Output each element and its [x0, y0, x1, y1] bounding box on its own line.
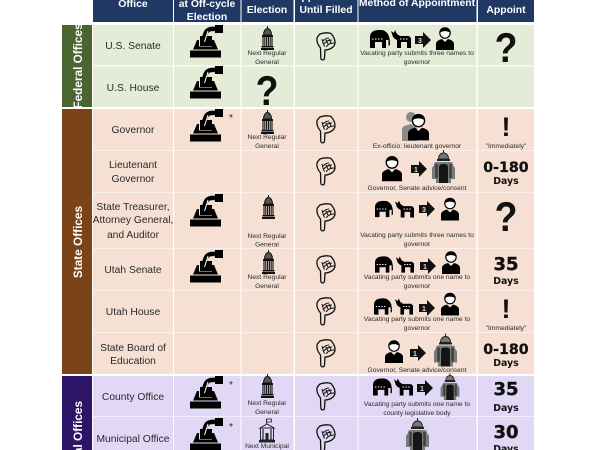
office names: Utah House — [106, 307, 160, 318]
time to appoint column: Days — [493, 403, 519, 414]
method of appointment: Utah Senate: Vacating party submits one name to — [364, 274, 470, 281]
icons: ballot box column: * — [229, 113, 233, 124]
time to appoint column: 35 — [493, 379, 519, 400]
time to appoint column: 0-180 — [483, 160, 529, 176]
panel: state offices — [62, 109, 534, 374]
office names: Education — [110, 356, 156, 367]
time to appoint column: Days — [493, 358, 519, 369]
method of appointment: U.S. Senate: governor — [404, 59, 431, 66]
time to appoint column: ! — [502, 112, 510, 142]
table header row — [93, 0, 534, 23]
icons: special election column: General — [255, 283, 279, 290]
table header row: Until Filled — [299, 5, 353, 16]
icons: ballot box column: * — [229, 380, 233, 391]
method of appointment: Utah Senate — [364, 252, 470, 290]
office names: Governor — [112, 125, 155, 136]
time to appoint column: "Immediately" — [486, 143, 527, 150]
icons: special election column: ? — [256, 68, 278, 114]
icons: special election column: Next Municipal — [245, 443, 289, 450]
time to appoint column: 30 — [493, 422, 519, 443]
icons: thumbs down column — [317, 33, 335, 450]
office names: and Auditor — [107, 230, 160, 241]
method of appointment: U.S. Senate: 3 — [418, 38, 422, 45]
office names: State Treasurer, — [96, 202, 170, 213]
method of appointment: Municipal Office — [406, 418, 429, 450]
method of appointment: Treasurer: governor — [404, 241, 431, 248]
method of appointment: Lieutenant Governor: Governor, Senate advice/consent — [368, 185, 467, 192]
method of appointment: Lieutenant Governor — [368, 150, 467, 192]
office names: County Office — [102, 392, 164, 403]
office names: State Board of — [100, 343, 166, 354]
method of appointment: Treasurer — [360, 198, 474, 248]
method of appointment: County Office — [364, 373, 470, 417]
time to appoint column: Days — [493, 176, 519, 187]
method of appointment: State Board of Education: 1 — [413, 351, 417, 358]
time to appoint column: 35 — [493, 254, 519, 275]
method of appointment: Utah Senate: governor — [404, 283, 431, 290]
office names: U.S. Senate — [105, 41, 161, 52]
method of appointment: State Board of Education — [368, 334, 467, 374]
time to appoint column: Days — [493, 276, 519, 287]
method of appointment: Utah House: 1 — [422, 306, 426, 313]
time to appoint column: ? — [495, 25, 517, 71]
method of appointment: Utah Senate: 1 — [423, 264, 427, 271]
method of appointment: Treasurer: 3 — [422, 207, 426, 214]
method of appointment: County Office: 1 — [420, 386, 424, 393]
time to appoint column — [483, 25, 529, 450]
icons: special election column: Next Regular — [247, 134, 287, 141]
method of appointment: Governor: Ex-officio: lieutenant governor — [373, 143, 462, 150]
method of appointment: U.S. Senate — [360, 28, 474, 66]
panel: state offices: State Offices — [71, 206, 85, 278]
icons: special election column: Next Regular — [247, 233, 287, 240]
icons: special election column: Next Regular — [247, 50, 287, 57]
icons: special election column: General — [255, 143, 279, 150]
office names: Utah Senate — [104, 265, 162, 276]
method of appointment: Governor — [373, 112, 462, 150]
icons: ballot box column: * — [229, 422, 233, 433]
icons: special election column — [245, 26, 289, 450]
icons: special election column: Next Regular — [247, 274, 287, 281]
time to appoint column: 0-180 — [483, 342, 529, 358]
icons: special election column: General — [255, 409, 279, 416]
method of appointment: State Board of Education: Governor, Senate advice/consent — [368, 367, 467, 374]
panel: local offices — [62, 376, 534, 450]
method of appointment: Lieutenant Governor: 1 — [414, 167, 418, 174]
table header row: Election — [247, 5, 287, 16]
icons: special election column: General — [255, 59, 279, 66]
method of appointment: Utah House: Vacating party submits one name to — [364, 316, 470, 323]
office names: Lieutenant — [109, 160, 157, 171]
time to appoint column: "Immediately" — [486, 325, 527, 332]
time to appoint column: ! — [502, 294, 510, 324]
method of appointment: County Office: county legislative body — [383, 410, 451, 417]
icons: ballot box column — [190, 25, 233, 450]
table header row: Appoint — [486, 5, 526, 16]
method of appointment: County Office: Vacating party submits one name to — [364, 401, 470, 408]
icons: special election column: Next Regular — [247, 400, 287, 407]
office names — [93, 41, 173, 445]
method of appointment: Utah House: governor — [404, 325, 431, 332]
office names: Municipal Office — [96, 434, 170, 445]
table header row: Election — [187, 12, 227, 23]
panel: federal offices — [62, 23, 534, 109]
method of appointment: U.S. Senate: Vacating party submits three names to — [360, 50, 474, 57]
panel: federal offices: Federal Offices — [71, 23, 85, 109]
office names: Governor — [112, 174, 155, 185]
method of appointment: Treasurer: Vacating party submits three names to — [360, 232, 474, 239]
method of appointment: Utah House — [364, 293, 470, 332]
office names: U.S. House — [107, 83, 160, 94]
icons: special election column: General — [255, 242, 279, 248]
time to appoint column: ? — [495, 194, 517, 240]
office names: Attorney General, — [93, 215, 173, 226]
